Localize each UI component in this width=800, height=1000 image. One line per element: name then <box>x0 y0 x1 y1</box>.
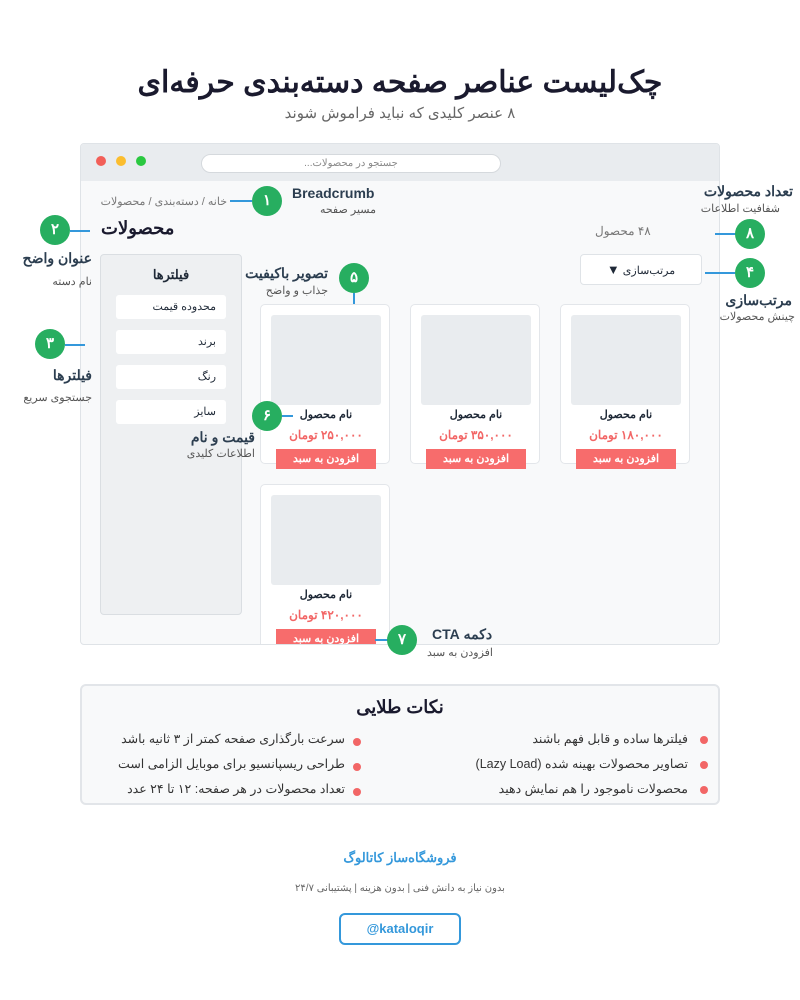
title: چک‌لیست عناصر صفحه دسته‌بندی حرفه‌ای <box>138 66 662 99</box>
product card 3: ۱۸۰,۰۰۰ تومان <box>589 428 663 442</box>
callout 8: count <box>701 183 793 249</box>
footer brand: فروشگاه‌ساز کاتالوگ <box>343 850 457 865</box>
callout 2: heading <box>23 215 92 288</box>
callout 1: breadcrumb <box>230 185 376 216</box>
product card 3: افزودن به سبد <box>593 453 659 465</box>
callout 6: price and name: اطلاعات کلیدی <box>187 448 255 460</box>
product card 4 <box>260 484 390 654</box>
product card 2: ۳۵۰,۰۰۰ تومان <box>439 428 513 442</box>
product card 2: افزودن به سبد <box>443 453 509 465</box>
search bar: جستجو در محصولات... <box>304 158 398 169</box>
callout 7: CTA: ۷ <box>398 631 406 648</box>
tips list: فیلترها ساده و قابل فهم باشند <box>532 732 688 746</box>
callout 2: heading: نام دسته <box>52 276 92 288</box>
callout 7: CTA: دکمه CTA <box>432 626 492 642</box>
callout 3: filters: جستجوی سریع <box>23 392 92 404</box>
product card 2 <box>410 304 540 464</box>
callout 4: sort: ۴ <box>746 264 754 281</box>
tips list: سرعت بارگذاری صفحه کمتر از ۳ ثانیه باشد <box>121 732 345 746</box>
callout 3: filters: ۳ <box>46 335 54 352</box>
callout 5: image <box>245 263 369 304</box>
product card 1: نام محصول <box>300 409 352 421</box>
callout 1: breadcrumb: ۱ <box>263 192 271 209</box>
callout 3: filters <box>23 329 92 404</box>
footer tagline: بدون نیاز به دانش فنی | بدون هزینه | پشتیبانی ۲۴/۷ <box>295 883 505 894</box>
product card 4: افزودن به سبد <box>293 633 359 645</box>
callout 2: heading: ۲ <box>51 221 59 238</box>
product card 1 <box>260 304 390 464</box>
callout 6: price and name: ۶ <box>263 407 271 424</box>
callout 6: price and name: قیمت و نام <box>191 429 255 445</box>
callout 7: CTA <box>375 625 493 659</box>
filter sidebar: فیلترها <box>153 267 189 282</box>
search bar <box>201 154 501 173</box>
product count: ۴۸ محصول <box>595 224 651 238</box>
footer handle button: @kataloqir <box>367 921 433 936</box>
sort dropdown <box>580 254 702 285</box>
callout 4: sort: چینش محصولات <box>720 311 795 323</box>
tips list: طراحی ریسپانسیو برای موبایل الزامی است <box>118 757 345 771</box>
product card 3 <box>560 304 690 464</box>
browser top bar <box>81 144 721 181</box>
breadcrumb: خانه / دسته‌بندی / محصولات <box>101 196 227 208</box>
callout 5: image: جذاب و واضح <box>266 285 328 297</box>
callout 1: breadcrumb: Breadcrumb <box>292 185 374 201</box>
callout 8: count: تعداد محصولات <box>704 183 793 199</box>
filter sidebar: محدوده قیمت <box>152 301 216 313</box>
callout 7: CTA: افزودن به سبد <box>427 647 493 659</box>
product card 1: افزودن به سبد <box>293 453 359 465</box>
product card 1: ۲۵۰,۰۰۰ تومان <box>289 428 363 442</box>
page heading: محصولات <box>101 218 174 238</box>
callout 6: price and name <box>187 401 293 460</box>
filter sidebar <box>100 254 242 615</box>
panel: browser mockup <box>80 143 720 645</box>
callout 8: count: شفافیت اطلاعات <box>701 203 780 215</box>
callout 5: image: تصویر باکیفیت <box>245 265 328 281</box>
tips list: تصاویر محصولات بهینه شده (Lazy Load) <box>476 757 688 771</box>
product card 4: ۴۲۰,۰۰۰ تومان <box>289 608 363 622</box>
product card 3: نام محصول <box>600 409 652 421</box>
callout 2: heading: عنوان واضح <box>23 250 92 266</box>
callout 3: filters: فیلترها <box>53 367 92 383</box>
filter sidebar: سایز <box>194 406 216 418</box>
filter sidebar: رنگ <box>198 371 216 383</box>
footer handle button <box>339 913 461 945</box>
filter sidebar: برند <box>198 336 216 348</box>
callout 5: image: ۵ <box>350 269 358 286</box>
sort dropdown: مرتب‌سازی ▼ <box>607 262 675 277</box>
product card 2: نام محصول <box>450 409 502 421</box>
panel: golden tips <box>80 684 720 805</box>
tips list: تعداد محصولات در هر صفحه: ۱۲ تا ۲۴ عدد <box>127 782 345 796</box>
subtitle: ۸ عنصر کلیدی که نباید فراموش شوند <box>285 105 515 122</box>
callout 4: sort: مرتب‌سازی <box>725 292 792 308</box>
tips list: محصولات ناموجود را هم نمایش دهید <box>499 782 688 796</box>
callout 8: count: ۸ <box>746 225 754 242</box>
tips list <box>118 732 708 796</box>
tips heading: نکات طلایی <box>356 697 444 717</box>
product card 4: نام محصول <box>300 589 352 601</box>
callout 4: sort <box>705 258 795 323</box>
callout 1: breadcrumb: مسیر صفحه <box>320 204 376 216</box>
